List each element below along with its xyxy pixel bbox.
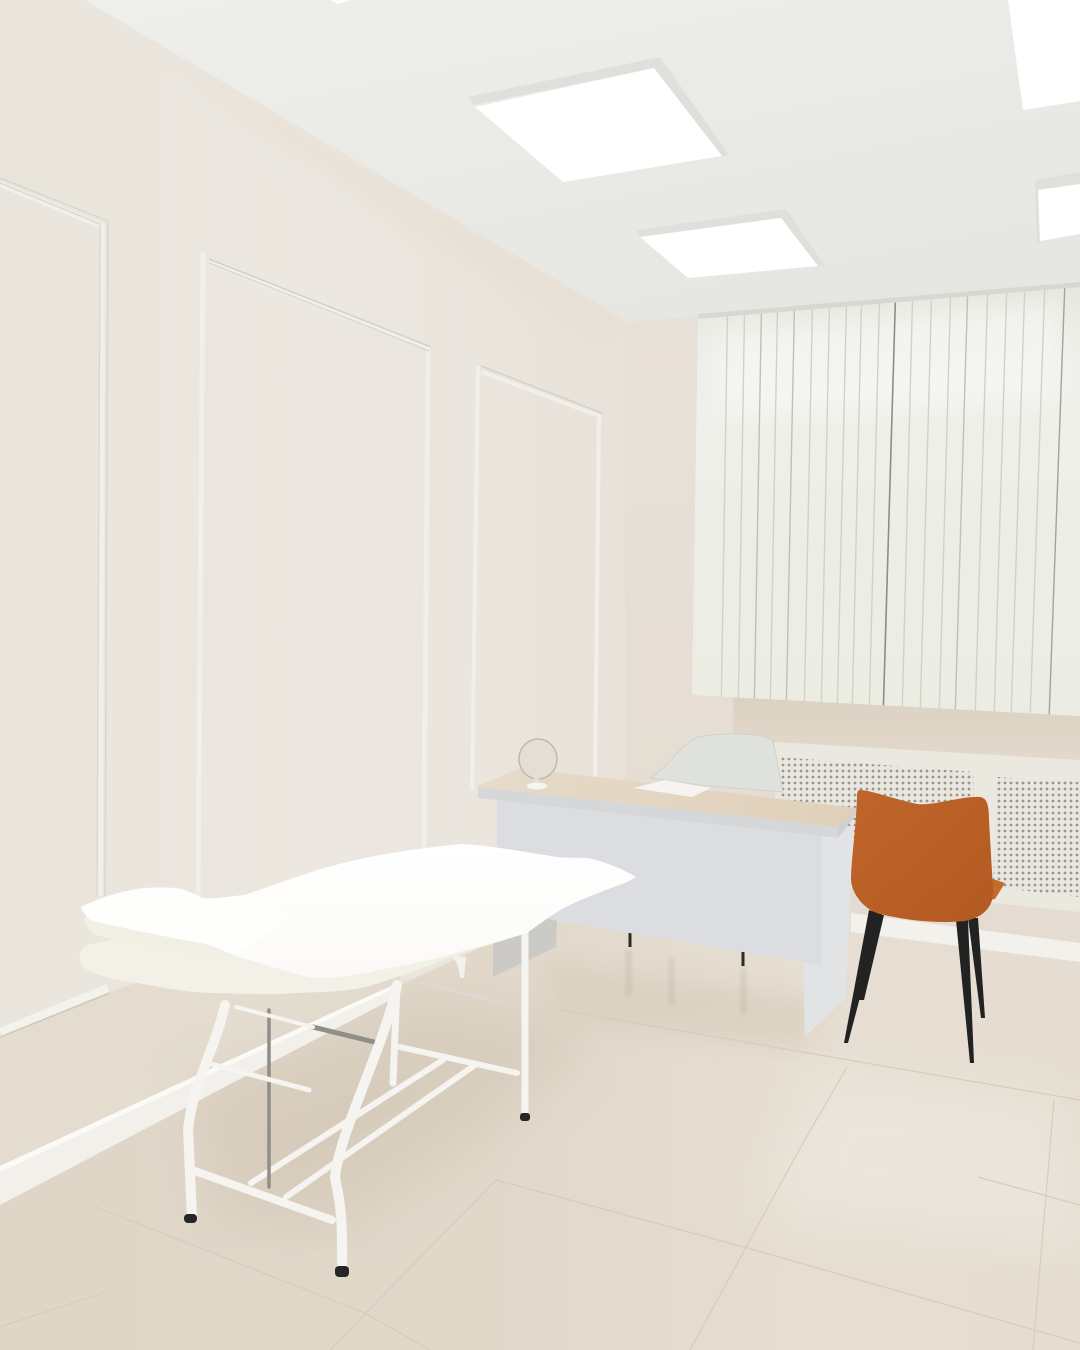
desk right leg xyxy=(803,825,853,1037)
desk chair legs behind desk xyxy=(630,925,743,966)
light panel: top right xyxy=(1008,0,1080,110)
desk front panel xyxy=(497,795,824,966)
blind slat lines xyxy=(721,280,1065,720)
headrest pillow xyxy=(81,887,290,959)
desk left side panel xyxy=(493,900,557,977)
short rail xyxy=(207,1063,309,1090)
massage table xyxy=(80,844,636,1277)
pillow front face xyxy=(84,912,234,959)
floor tile grout xyxy=(0,1010,1080,1350)
wall mouldings xyxy=(0,178,602,1037)
chair seat xyxy=(988,878,1005,900)
chrome rods xyxy=(269,1010,374,1187)
orange chair xyxy=(844,790,1005,1063)
ceiling xyxy=(85,0,1080,322)
chair back xyxy=(851,790,993,922)
mattress sheet xyxy=(200,844,636,978)
light panel: lower centre xyxy=(636,209,825,278)
grey armchair behind desk xyxy=(650,734,783,792)
table frame xyxy=(188,932,525,1270)
chair legs xyxy=(844,910,985,1063)
desk top xyxy=(478,768,857,829)
vertical blinds xyxy=(692,280,1080,720)
moulding: middle panel xyxy=(198,252,431,897)
pillow top face xyxy=(81,887,290,955)
moulding: left panel xyxy=(0,178,110,1037)
back wall baseboard xyxy=(851,913,1080,962)
back legs and rear rails xyxy=(251,932,525,1197)
left leg xyxy=(188,1005,225,1217)
strip under blinds xyxy=(733,697,1080,760)
sheet end flap xyxy=(452,955,466,978)
radiator cover xyxy=(775,742,1080,912)
light panel: right xyxy=(1035,172,1080,243)
left wall xyxy=(0,0,628,1210)
left wall baseboard xyxy=(0,983,400,1205)
rod sleeve xyxy=(236,1007,313,1027)
floor reflections xyxy=(190,950,1080,1250)
desk xyxy=(478,739,857,1037)
ceiling lights xyxy=(330,0,1080,278)
near leg xyxy=(335,985,397,1270)
front rail xyxy=(192,1170,332,1220)
mattress body xyxy=(80,900,560,994)
light panel: top edge xyxy=(330,0,350,4)
light panel: large centre xyxy=(468,57,729,182)
floor xyxy=(0,880,1080,1350)
blind headrail xyxy=(698,282,1080,319)
table feet xyxy=(184,1113,530,1277)
back wall xyxy=(625,284,1080,960)
book on desk xyxy=(633,780,711,797)
moulding: right panel xyxy=(472,366,602,790)
mirror xyxy=(519,739,557,790)
